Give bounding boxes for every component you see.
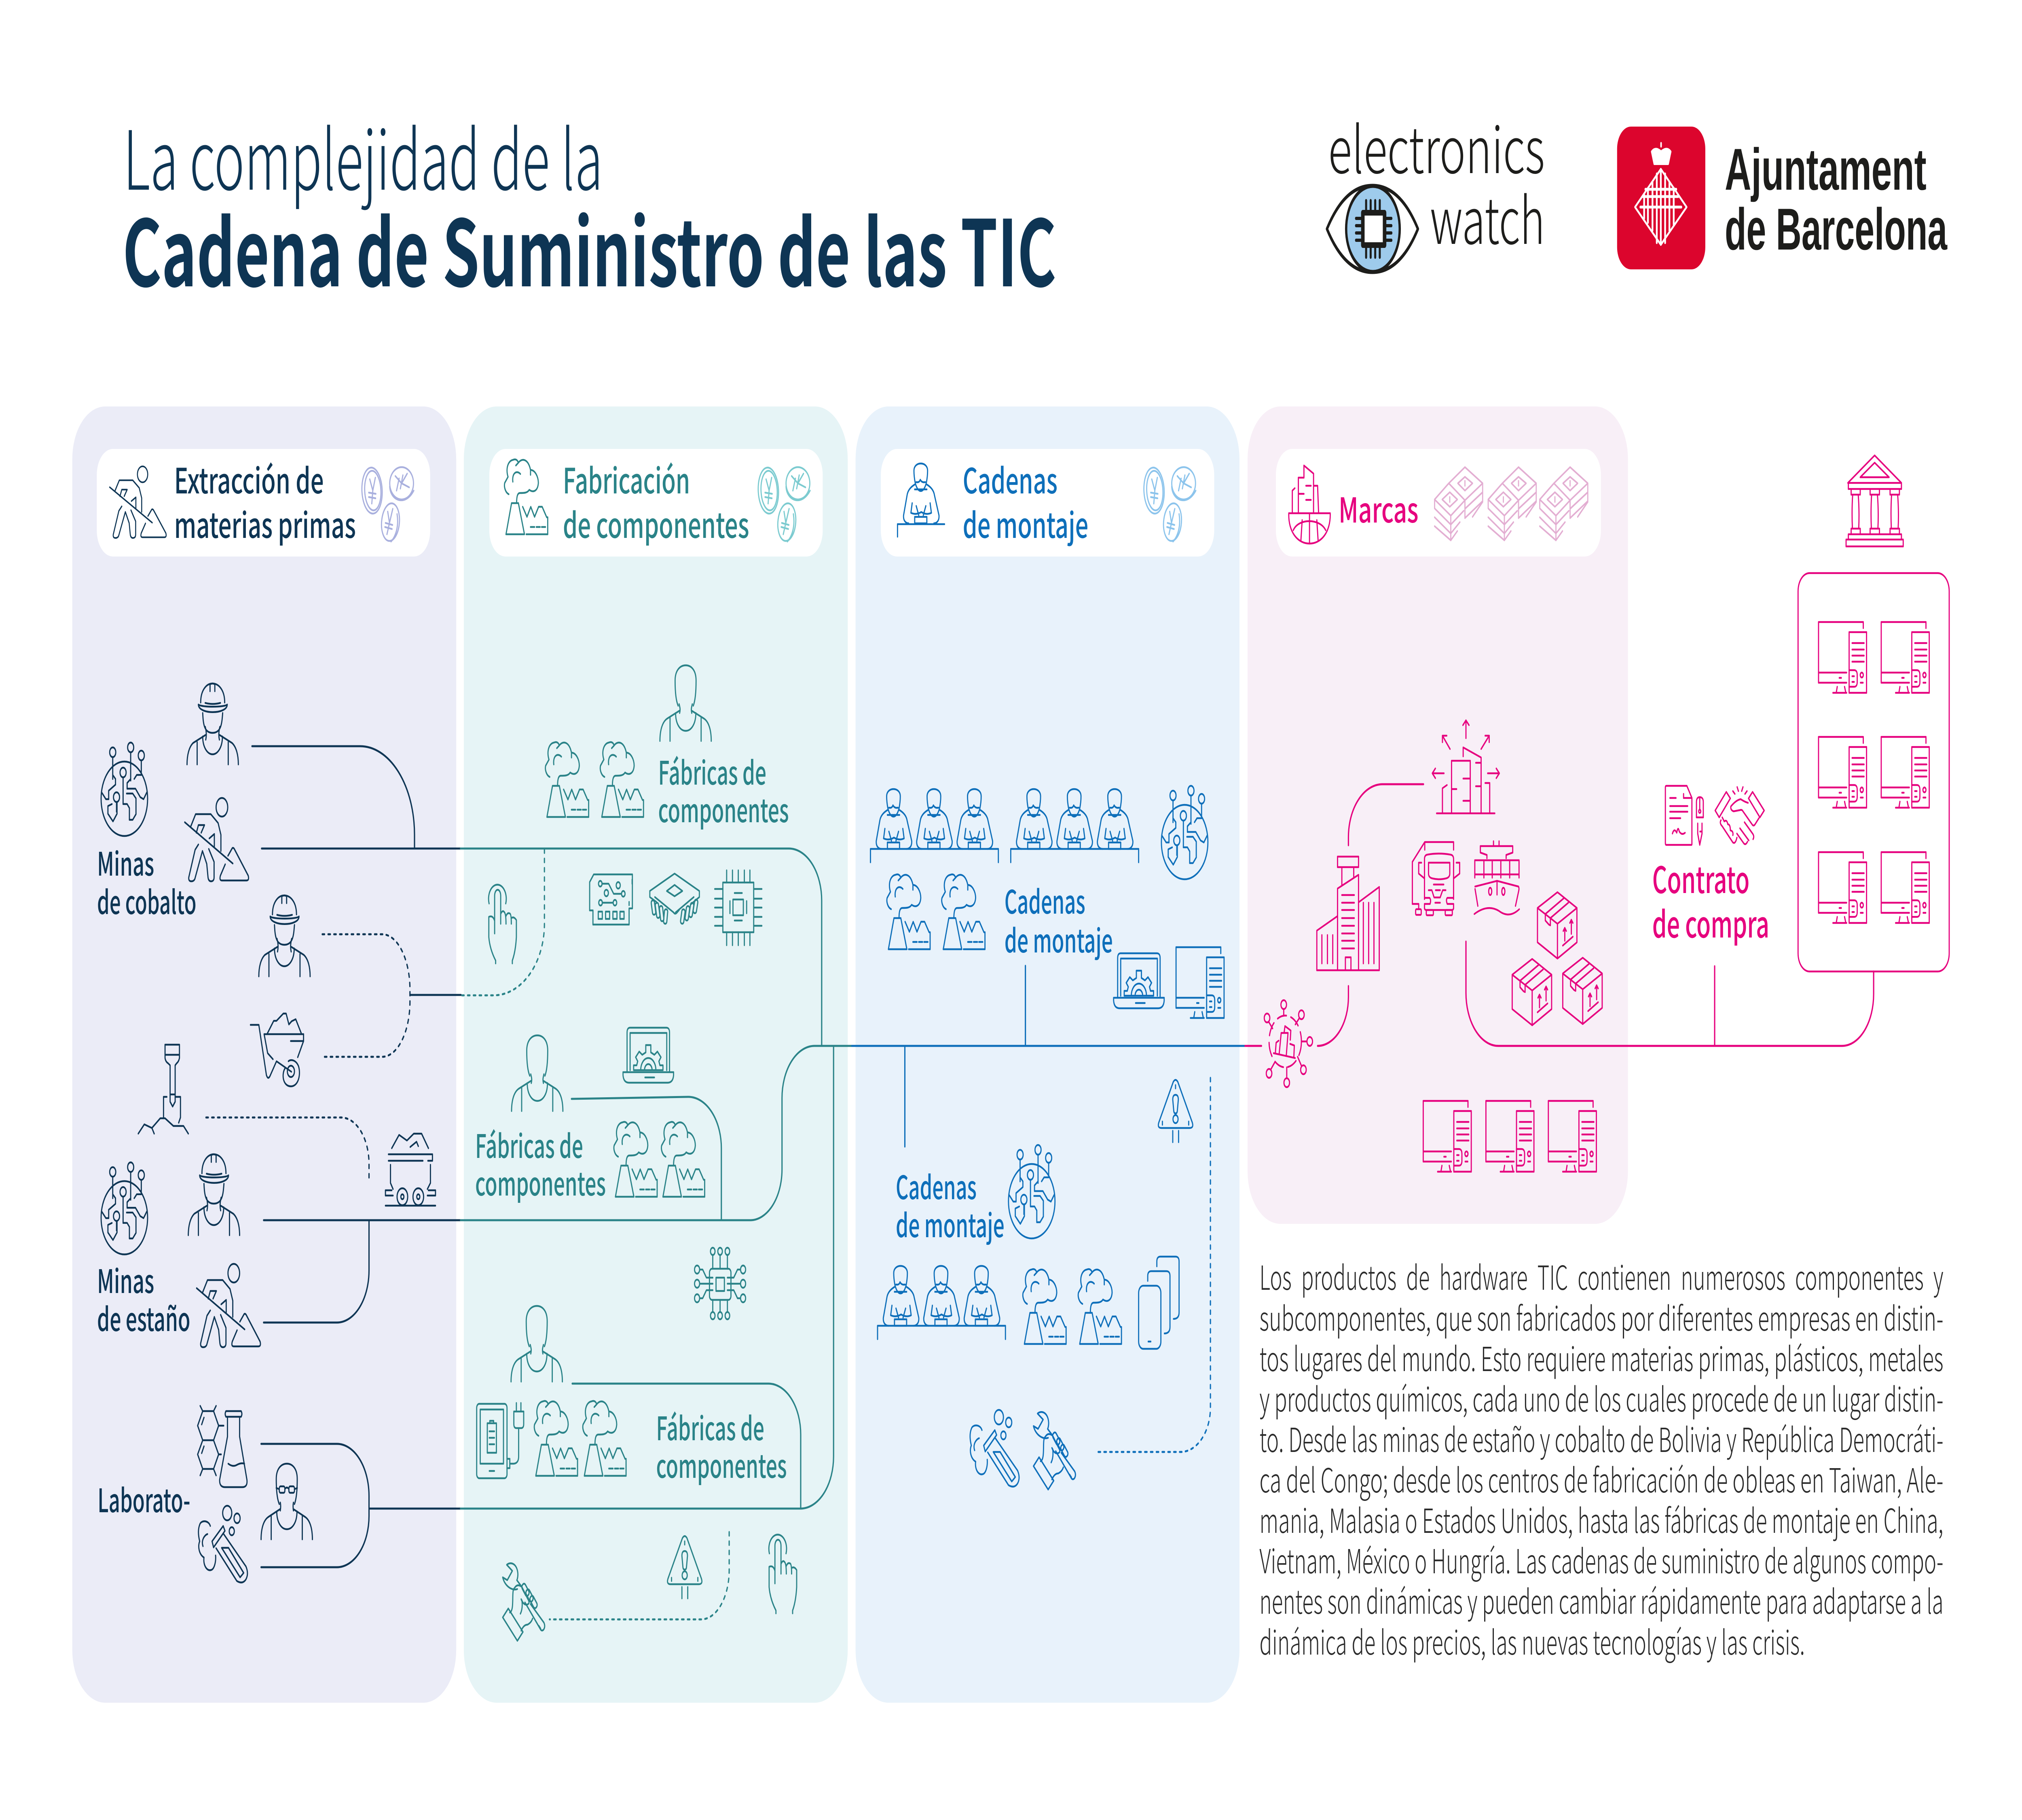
icon: boxes: [1512, 892, 1602, 1025]
text block: description: mania, Malasia o Estados Unidos, hasta las fábricas de montaje en China,: [1259, 1494, 1944, 1543]
header text: marcas: Marcas: [1339, 483, 1419, 533]
logo: Ajuntament de Barcelona: Ajuntament: [1725, 136, 1927, 202]
header icon: globe building: [1289, 466, 1330, 544]
icon: factory: [583, 1401, 626, 1476]
icon: globe: [1161, 786, 1208, 879]
icon: warning: [1158, 1080, 1193, 1142]
icon: globe: [101, 1162, 148, 1255]
text block: description: dinámica de los precios, las nuevas tecnologías y las crisis.: [1259, 1616, 1805, 1664]
icon: worker: [259, 895, 310, 976]
label: cadenas de montaje: Cadenas: [1005, 877, 1085, 923]
icon: coins: [360, 466, 414, 544]
icon: phones: [1139, 1257, 1179, 1349]
text block: description: nentes son dinámicas y pueden cambiar rápidamente para adaptarse a la: [1259, 1575, 1944, 1623]
icon: handshake: [1715, 787, 1764, 844]
panel 1 content: [97, 453, 436, 1583]
label: minas de cobalto: Minas: [97, 839, 154, 885]
title: La complejidad de la: [123, 95, 603, 214]
label: fábricas de componentes: componentes: [658, 785, 789, 832]
header icon: miner: [110, 466, 166, 538]
text block: description: Vietnam, México o Hungría. Las cadenas de suministro de algunos compo-: [1259, 1535, 1944, 1583]
header text: extracción: materias primas: [174, 497, 356, 548]
icon: wheelbarrow: [250, 1014, 304, 1086]
header box: cadenas: [881, 449, 1214, 557]
label: laboratorios: Laborato-: [97, 1475, 190, 1522]
header text: extracción: Extracción de: [174, 453, 324, 504]
icon: contract document: [1665, 786, 1692, 845]
label: fábricas de componentes: componentes: [475, 1159, 606, 1205]
icon: miner: [197, 1264, 260, 1347]
icon: test tube: [970, 1410, 1019, 1487]
header box: marcas: [1276, 449, 1601, 557]
icon: miner: [185, 798, 249, 881]
icon: globe: [101, 743, 148, 836]
header text: cadenas de montaje: [963, 453, 1088, 548]
panel: buyer computers box: [1798, 573, 1949, 971]
label: minas de estaño: [97, 1256, 190, 1341]
label: contrato de compra: de compra: [1652, 895, 1769, 948]
icon: pen: [1696, 797, 1703, 845]
text block: description: [1259, 1251, 1944, 1664]
text block: description: tos lugares del mundo. Esto requiere materias primas, plásticos, metales: [1259, 1333, 1944, 1381]
header box: fabricación: [489, 449, 823, 557]
icon: truck: [1412, 842, 1459, 915]
header text: extracción: [174, 453, 356, 548]
icon: public institution: [1846, 455, 1903, 546]
icon: pointing hand: [769, 1534, 797, 1613]
icon: memory chip: [650, 874, 699, 924]
text block: description: Los productos de hardware TIC contienen numerosos componentes y: [1259, 1251, 1944, 1299]
label: fábricas de componentes: [656, 1403, 787, 1488]
header icon: factory: [504, 459, 548, 534]
label: fábricas de componentes: componentes: [656, 1441, 787, 1488]
label: cadenas de montaje: Cadenas: [896, 1162, 977, 1209]
panel: fabricación de componentes: [464, 406, 848, 1703]
logo: electronics watch: electronics: [1328, 99, 1545, 192]
icon: assembly workers: [870, 789, 998, 862]
icon: processor: [715, 870, 762, 945]
icon: circuit board: [590, 874, 632, 925]
label: cadenas de montaje: [1005, 877, 1113, 962]
header text: fabricación: Fabricación: [563, 453, 690, 504]
connectors: assembly (blue): [852, 966, 1245, 1452]
label: fábricas de componentes: [475, 1121, 606, 1205]
header text: cadenas de montaje: de montaje: [963, 497, 1088, 548]
header box: extracción: [97, 449, 430, 557]
header icon: worker at desk: [897, 463, 945, 537]
icon: test tube: [199, 1506, 247, 1583]
icon: headquarters building: [1317, 857, 1379, 970]
connectors: brands (pink): [1245, 784, 1874, 1046]
text block: description: ca del Congo; desde los centros de fabricación de obleas en Taiwan, Ale-: [1259, 1454, 1944, 1502]
label: fábricas de componentes: [658, 748, 789, 832]
label: contrato de compra: [1652, 851, 1769, 948]
label: cadenas de montaje: de montaje: [896, 1200, 1005, 1247]
icon: scientist: [261, 1464, 312, 1539]
icon: laptop: [1114, 953, 1164, 1008]
label: contrato de compra: Contrato: [1652, 851, 1749, 904]
icon: worker: [188, 1154, 239, 1235]
icons: computers: [1423, 1101, 1597, 1172]
label: fábricas de componentes: Fábricas de: [475, 1121, 583, 1168]
icon: pointing hand: [489, 885, 516, 963]
label: fábricas de componentes: Fábricas de: [658, 748, 766, 794]
label: cadenas de montaje: de montaje: [1005, 916, 1113, 962]
icon: laptop: [623, 1028, 674, 1083]
text block: description: y productos químicos, cada uno de los cuales procede de un lugar distin-: [1259, 1373, 1944, 1421]
logo: Ajuntament de Barcelona: de Barcelona: [1725, 196, 1948, 262]
icon: coins: [1142, 466, 1196, 544]
label: cadenas de montaje: [896, 1162, 1005, 1247]
icon: flask and molecule: [198, 1406, 247, 1487]
logo: Ajuntament de Barcelona: [1617, 127, 1948, 269]
icon: factory: [614, 1122, 657, 1197]
icon: mine cart: [385, 1134, 436, 1206]
icon: factory: [942, 874, 985, 949]
header text: fabricación: [563, 453, 749, 548]
icon: cargo ship: [1474, 841, 1519, 914]
panel: extracción de materias primas: [72, 406, 456, 1703]
icon: phone with charger: [477, 1403, 524, 1478]
header text: fabricación: de componentes: [563, 497, 749, 548]
label: minas de cobalto: de cobalto: [97, 877, 197, 924]
icon: coins: [757, 466, 810, 544]
icon: wrench: [1034, 1412, 1075, 1490]
icon: factory: [1078, 1269, 1121, 1344]
label: minas de estaño: Minas: [97, 1256, 154, 1303]
icon: assembly workers: [1011, 789, 1139, 862]
icon: factory: [600, 742, 643, 817]
icon: worker: [511, 1306, 563, 1382]
label: fábricas de componentes: Fábricas de: [656, 1403, 764, 1450]
icon: factory: [546, 742, 589, 817]
panel 3 content: [870, 453, 1224, 1490]
title: [123, 95, 1056, 313]
header text: cadenas de montaje: Cadenas: [963, 453, 1058, 504]
title: Cadena de Suministro de las TIC: [123, 181, 1056, 313]
icon: factory: [887, 874, 930, 949]
icon: factory: [534, 1401, 577, 1476]
icon: distributed building node: [1264, 1000, 1313, 1087]
icons: money stacks: [1435, 467, 1588, 540]
panel 2 content: [475, 453, 810, 1641]
icon: desktop: [1176, 947, 1224, 1018]
icon: wrench: [503, 1563, 545, 1641]
icon: building with arrows: [1432, 720, 1500, 813]
icon: factory: [662, 1122, 704, 1197]
panel: cadenas de montaje: [856, 406, 1239, 1703]
label: minas de cobalto: [97, 839, 197, 924]
icon: chip network: [695, 1248, 746, 1319]
icon: worker: [512, 1035, 563, 1111]
text block: description: subcomponentes, que son fabricados por diferentes empresas en distin-: [1259, 1292, 1944, 1340]
logo: electronics watch: [1327, 99, 1545, 272]
panel 4 content: [1264, 455, 1949, 1172]
icon: factory: [1023, 1269, 1066, 1344]
label: minas de estaño: de estaño: [97, 1294, 190, 1341]
connectors: extraction (navy): [206, 746, 461, 1567]
logo: electronics watch: watch: [1430, 170, 1545, 262]
icon: assembly workers: [878, 1266, 1005, 1339]
icon: worker: [187, 684, 238, 764]
icon: shovel: [138, 1045, 188, 1134]
icon: worker: [660, 665, 711, 741]
connectors: components (teal): [461, 849, 852, 1619]
icon: warning: [668, 1536, 702, 1598]
panel: marcas: [1248, 406, 1628, 1224]
icon: globe: [1009, 1145, 1055, 1238]
text block: description: to. Desde las minas de estaño y cobalto de Bolivia y República Democráti-: [1259, 1414, 1944, 1462]
